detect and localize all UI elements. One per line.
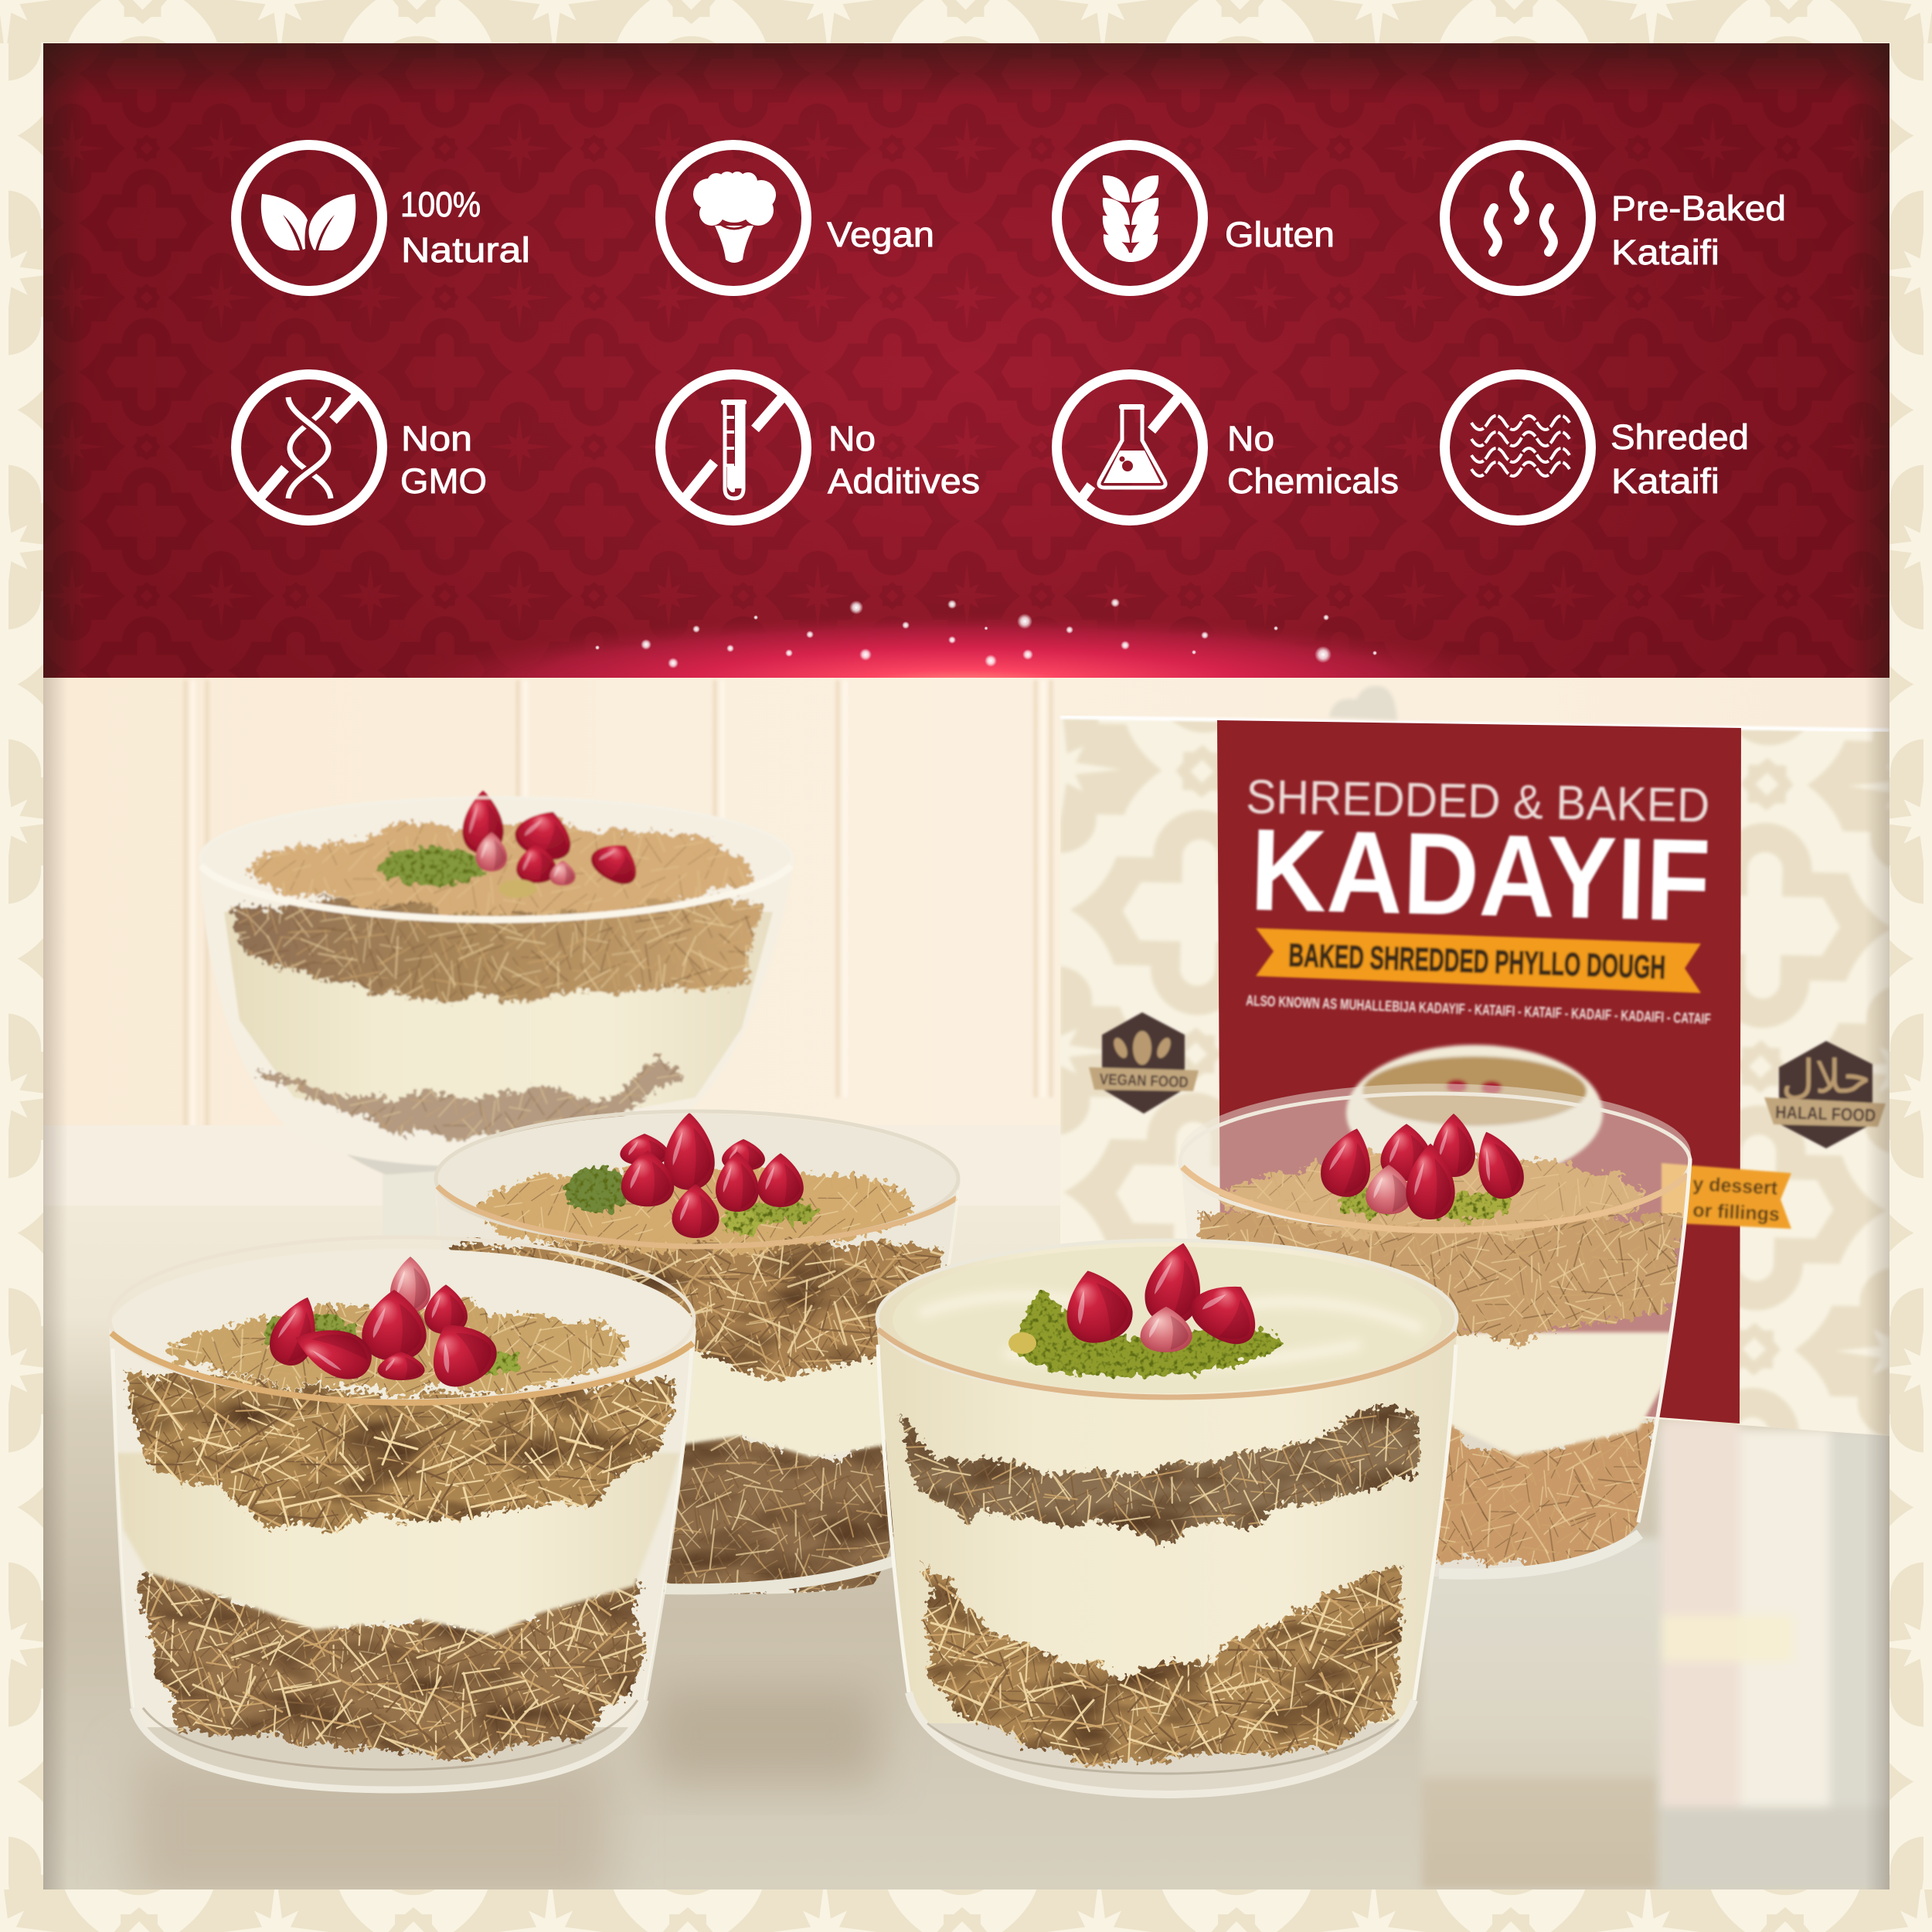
glass rim and base	[110, 1237, 694, 1790]
wall with vertical panelling	[43, 678, 1889, 1234]
glass: footed dessert bowl at back left	[193, 788, 804, 1236]
badge: halal food: حلال	[1781, 1050, 1871, 1104]
panel: product photograph	[43, 678, 1889, 1901]
label: No Additives: No	[828, 419, 876, 458]
glass rim and base	[877, 1240, 1457, 1794]
glass: back right dessert	[1167, 1082, 1708, 1584]
label: 100% Natural	[402, 192, 529, 263]
icon: wheat	[1103, 175, 1158, 262]
bowl rim	[200, 798, 792, 920]
glass: back middle dessert	[417, 1105, 974, 1607]
label: No Additives: Additives	[828, 461, 980, 501]
item: Gluten	[1057, 145, 1335, 291]
box orange tag	[1662, 1163, 1791, 1229]
box ribbon: BAKED SHREDDED PHYLLO DOUGH	[1288, 937, 1666, 985]
label: Shreded Kataifi	[1611, 417, 1749, 501]
icon: crossed-out flask	[1079, 393, 1182, 502]
label: No Chemicals: No	[1227, 419, 1274, 458]
label: Pre-Baked Kataifi	[1611, 189, 1786, 272]
label: Pre-Baked Kataifi: Pre-Baked	[1611, 189, 1786, 228]
label: No Chemicals: Chemicals	[1227, 461, 1399, 501]
glass: front right dessert	[866, 1233, 1468, 1801]
garnish: pistachio and pomegranate	[1315, 1114, 1530, 1219]
label: No Additives	[828, 419, 980, 501]
icon: steam	[1488, 175, 1553, 252]
garnish: pistachio and pomegranate	[379, 791, 647, 898]
photo edge shading	[43, 678, 1889, 1889]
box orange tag: y dessert	[1692, 1173, 1778, 1199]
badge: halal food: HALAL FOOD	[1775, 1102, 1876, 1125]
badge: vegan food	[1089, 1012, 1199, 1114]
label: Gluten: Gluten	[1225, 215, 1335, 254]
icon: leaves	[261, 194, 355, 250]
label: Shreded Kataifi: Shreded	[1611, 417, 1749, 457]
label: Pre-Baked Kataifi: Kataifi	[1611, 233, 1719, 272]
icon: crossed-out test tube	[682, 394, 785, 502]
label: Vegan: Vegan	[827, 215, 934, 254]
box front red label	[1217, 720, 1741, 1423]
glass: front left dessert	[100, 1229, 703, 1801]
box handle	[1329, 686, 1397, 720]
box bowl image	[1346, 1045, 1603, 1181]
item: No Chemicals	[1057, 374, 1399, 521]
product box	[1060, 686, 1889, 1445]
icon: broccoli	[693, 172, 776, 263]
item: No Additives	[660, 374, 980, 521]
label: No Chemicals	[1227, 419, 1399, 501]
box orange tag: or fillings	[1692, 1199, 1780, 1226]
label: Shreded Kataifi: Kataifi	[1611, 461, 1719, 501]
label: Non GMO	[400, 419, 487, 501]
item: Non GMO	[236, 374, 487, 521]
glow at the bottom of the panel	[461, 598, 1471, 678]
panel: red product attributes	[43, 43, 1889, 678]
label: Non GMO: GMO	[400, 461, 487, 501]
box reflection on the table	[1422, 1420, 1889, 1889]
label: Non GMO: Non	[401, 419, 472, 458]
label: 100% Natural: Natural	[401, 230, 530, 270]
glass rim and base	[436, 1111, 958, 1589]
box ribbon	[1256, 928, 1701, 993]
box title: KADAYIF: KADAYIF	[1249, 804, 1712, 946]
garnish: crushed pistachio and pomegranate	[1009, 1237, 1283, 1377]
glass rim and base	[1180, 1094, 1690, 1574]
garnish: pistachio and pomegranate	[564, 1113, 816, 1238]
item: Vegan	[660, 145, 934, 291]
garnish: pistachio and pomegranate	[263, 1257, 519, 1396]
item: Pre-Baked Kataifi	[1445, 145, 1786, 291]
icon: shredded waves	[1471, 416, 1570, 476]
box subtitle: ALSO KNOWN AS MUHALLEBIJA KADAYIF - KATAIFI - KATAIF - KADAIF - KADAIFI - CATAIF	[1246, 993, 1711, 1028]
icon: crossed-out DNA	[258, 393, 359, 500]
box title: SHREDDED & BAKED: SHREDDED & BAKED	[1246, 770, 1710, 833]
badge: vegan food: VEGAN FOOD	[1099, 1071, 1189, 1091]
badge: halal food	[1764, 1041, 1886, 1148]
item: 100% Natural	[236, 145, 530, 291]
item: Shreded Kataifi	[1445, 374, 1749, 521]
label: 100% Natural: 100%	[400, 185, 481, 224]
tabletop	[43, 1206, 1889, 1901]
